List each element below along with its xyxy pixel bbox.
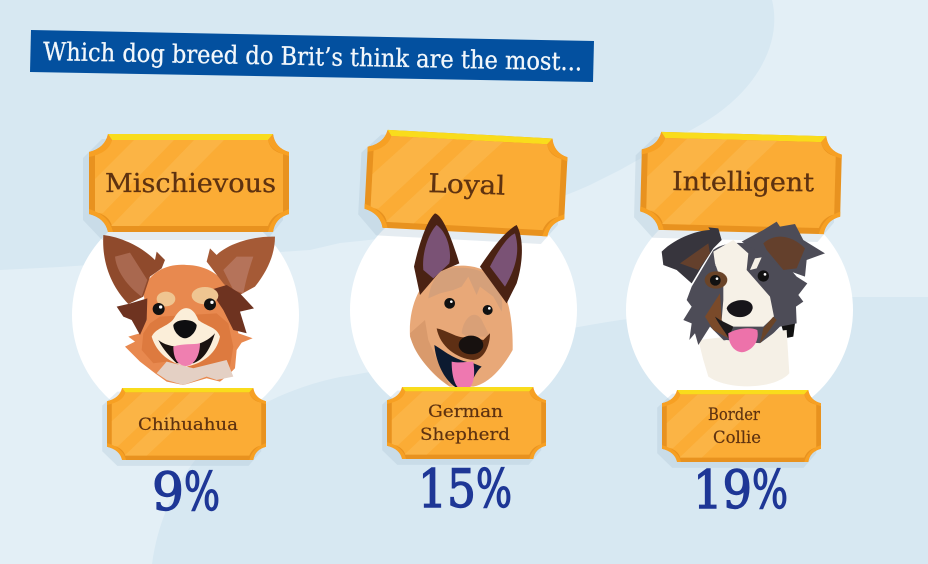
percentage: 15%: % — [476, 460, 512, 520]
percentage: 9%: 9 — [152, 463, 184, 523]
white circle — [72, 202, 299, 428]
breed plaque: Chihuahua: Chihuahua — [138, 415, 238, 435]
breed plaque: Border Collie: Border — [708, 405, 761, 425]
panel: intelligent border collie — [626, 131, 853, 521]
icon: german shepherd head — [410, 213, 522, 392]
white circle — [350, 196, 577, 424]
breed plaque: Border Collie: Collie — [713, 428, 761, 448]
heading plaque: Intelligent — [634, 131, 842, 243]
panel: loyal german shepherd — [350, 129, 577, 520]
heading plaque: Intelligent: Intelligent — [672, 167, 815, 198]
breed plaque: Border Collie — [657, 390, 821, 468]
breed plaque: German Shepherd: Shepherd — [420, 425, 510, 445]
heading plaque: Mischievous: Mischievous — [105, 169, 276, 199]
title banner: Which dog breed do Brit’s think are the most... — [43, 37, 582, 76]
breed plaque: German Shepherd: German — [428, 402, 503, 422]
panel: mischievous chihuahua — [72, 134, 299, 523]
heading plaque: Loyal: Loyal — [428, 169, 506, 202]
percentage: 19%: % — [752, 461, 788, 521]
breed plaque: Chihuahua — [102, 388, 266, 466]
breed plaque: German Shepherd — [382, 387, 546, 465]
percentage: 9% — [152, 463, 220, 523]
white circle — [626, 196, 853, 424]
percentage: 19% — [693, 461, 788, 521]
heading plaque: Mischievous — [83, 134, 289, 240]
percentage: 15%: 15 — [418, 460, 476, 520]
percentage: 19%: 19 — [693, 461, 752, 521]
percentage: 9%: % — [184, 463, 220, 523]
icon: border collie head — [662, 222, 825, 386]
heading plaque: Loyal — [357, 129, 568, 245]
icon: chihuahua head — [103, 235, 275, 385]
